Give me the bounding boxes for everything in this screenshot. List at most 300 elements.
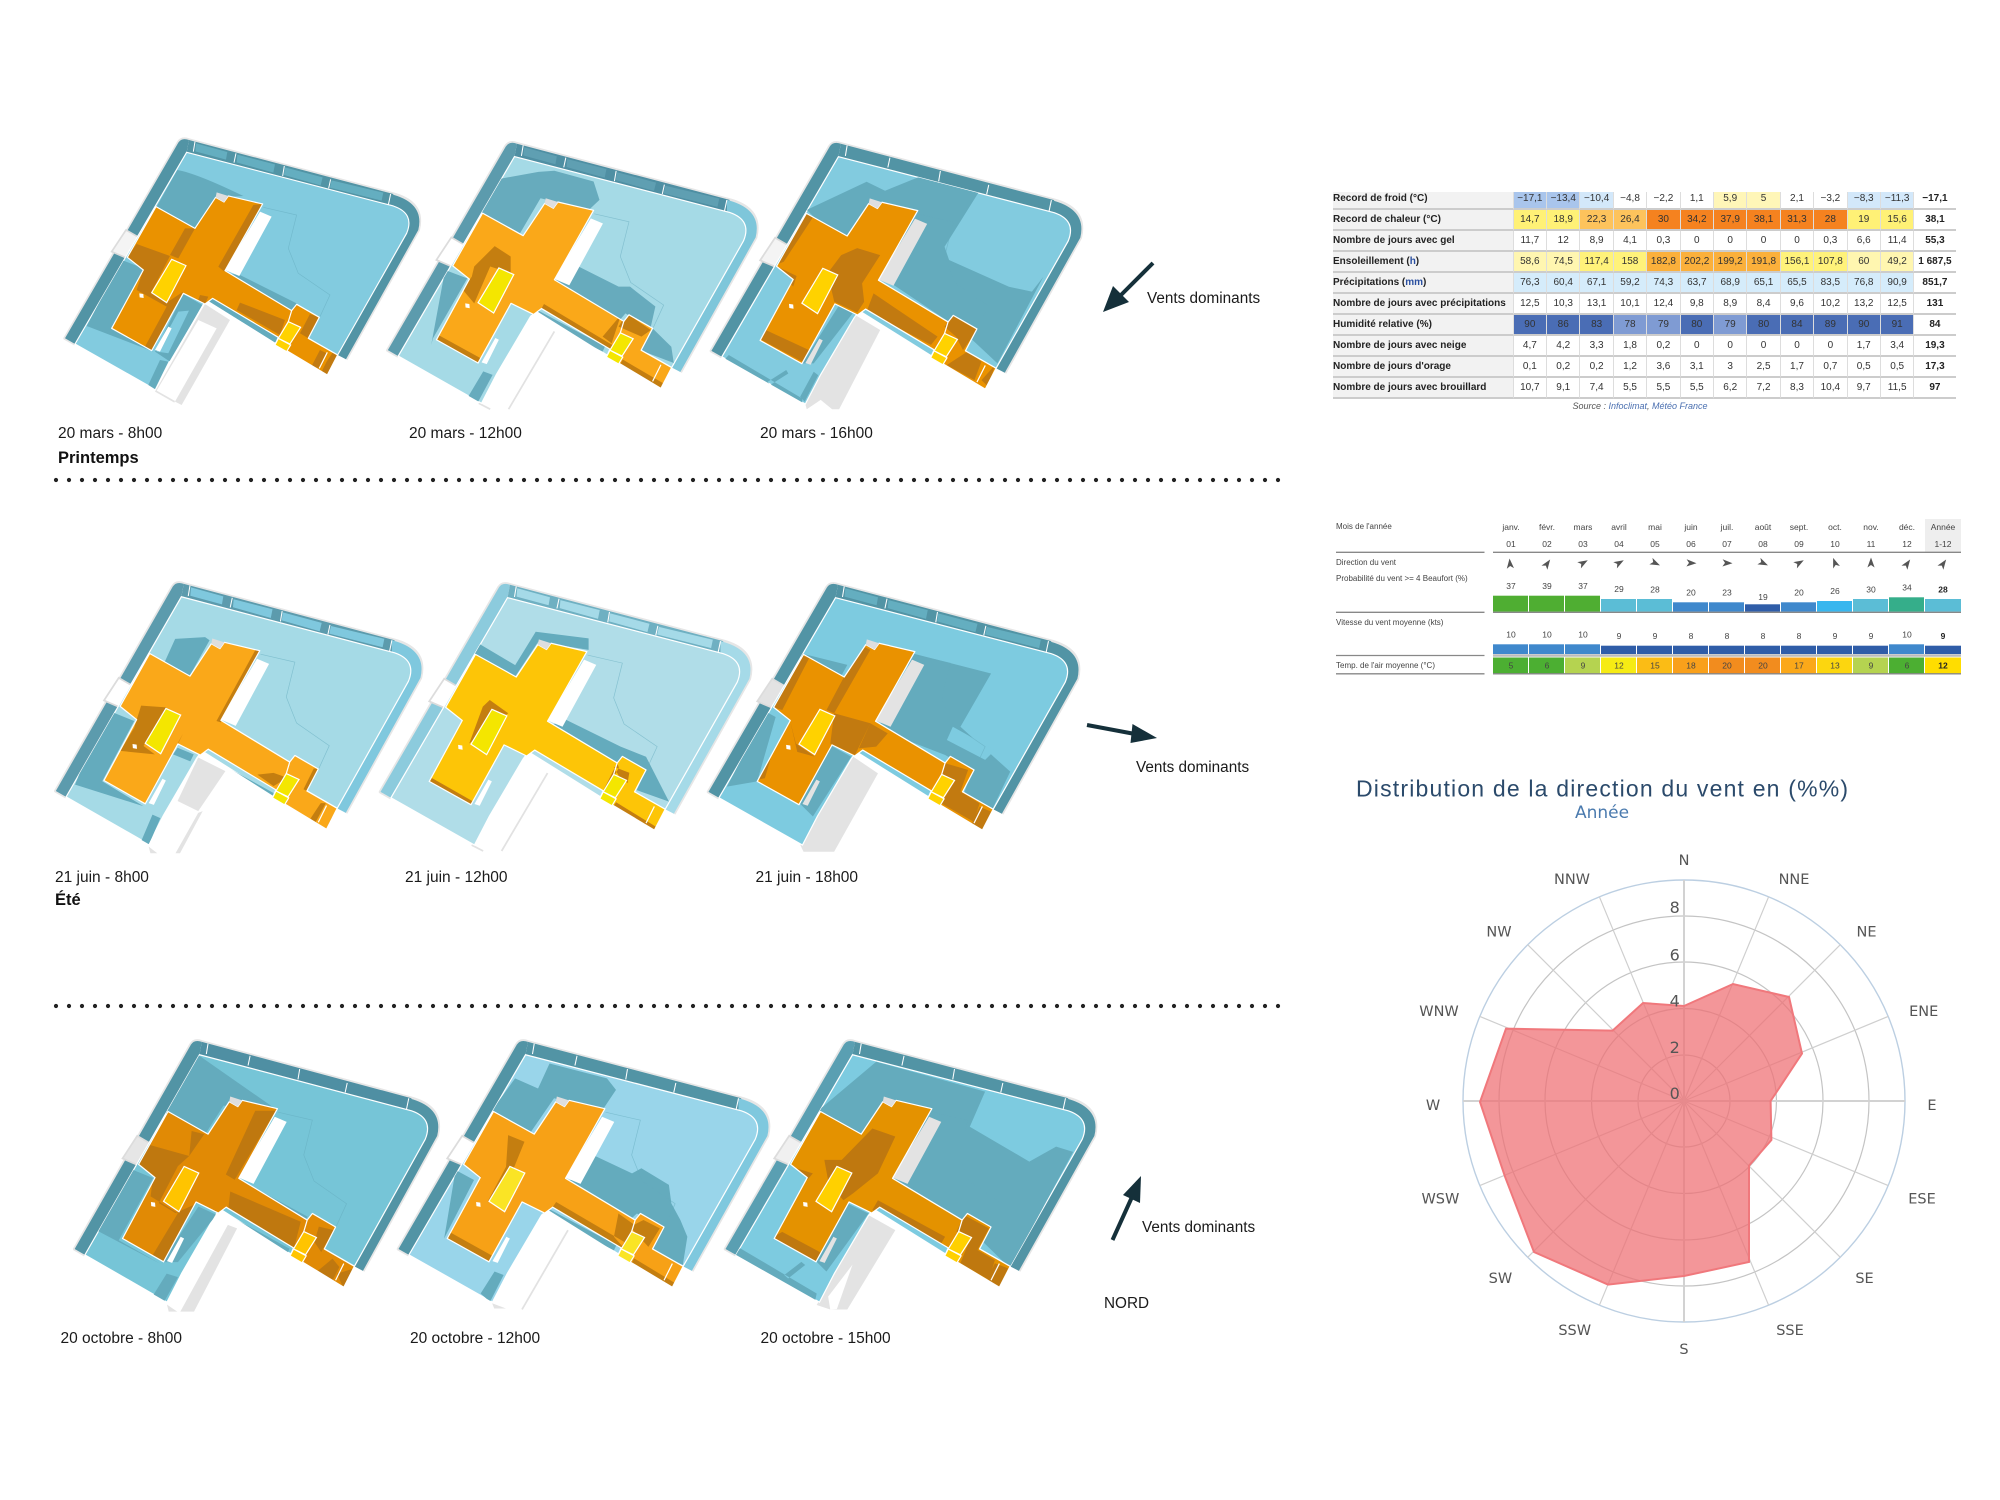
sun and wind study canvas (54, 138, 1961, 1354)
climate table: 10,4 (1821, 382, 1840, 392)
speed values: 9 (1653, 631, 1658, 641)
garden shadows (724, 177, 1043, 403)
label: north: NORD (1104, 1295, 1149, 1312)
climate table: 9,7 (1857, 382, 1871, 392)
climate table: Nombre de jours avec gel (1333, 234, 1455, 246)
climate table: Record de chaleur (°C) (1333, 214, 1441, 224)
climate table: 0,2 (1590, 360, 1604, 372)
climate table: 0 (1727, 234, 1733, 246)
probability values (1506, 581, 1948, 602)
climate table: 55,3 (1925, 234, 1945, 246)
caption: 21 juin - 12h00 (405, 869, 508, 886)
month headers: 01 (1506, 539, 1516, 549)
climate table: 9,6 (1790, 298, 1804, 308)
plan: 21 juin 18h00 (708, 584, 1079, 852)
climate table: 10,7 (1520, 382, 1540, 392)
climate table: 90,9 (1887, 276, 1907, 288)
direction labels: S (1679, 1342, 1689, 1358)
speed values: 9 (1941, 631, 1946, 641)
climate table: 79 (1658, 318, 1669, 330)
skylights and outlines (104, 639, 337, 829)
climate table: 0 (1727, 340, 1733, 350)
climate table: −10,4 (1584, 192, 1609, 204)
month headers: nov. (1863, 522, 1879, 532)
climate table: −11,3 (1885, 192, 1909, 204)
month headers: janv. (1501, 522, 1520, 532)
climate table: 0,1 (1523, 360, 1537, 372)
climate table: 11,7 (1520, 234, 1539, 246)
probability values: 37 (1506, 581, 1516, 591)
month headers: 12 (1902, 539, 1912, 549)
climate table: 12,5 (1520, 298, 1540, 308)
header shading: year (1925, 519, 1961, 553)
caption: 21 juin - 8h00 (55, 869, 149, 886)
plan: 20 octobre 8h00 (75, 1041, 438, 1312)
wind rose chart (1419, 853, 1938, 1358)
courtyards (492, 1112, 675, 1263)
climate table: 5,5 (1656, 382, 1670, 392)
climate table: Humidité relative (%) (1333, 318, 1432, 330)
skylights and outlines (757, 639, 993, 830)
road (479, 331, 554, 409)
courtyards (805, 214, 988, 365)
month headers: juin (1683, 522, 1698, 532)
direction labels: WSW (1421, 1192, 1459, 1208)
month headers: 09 (1794, 539, 1804, 549)
month headers: 06 (1686, 539, 1696, 549)
building (123, 1100, 354, 1287)
climate table: 58,6 (1520, 256, 1540, 266)
climate table: 10,1 (1620, 298, 1640, 308)
radial axis labels: 8 (1670, 898, 1680, 917)
probability values: 34 (1902, 582, 1912, 592)
climate table: 10,3 (1554, 298, 1573, 308)
climate table: 0,5 (1890, 360, 1904, 372)
garden shadows (727, 653, 1010, 817)
temperature values: 15 (1650, 660, 1660, 670)
probability values: 28 (1650, 584, 1660, 594)
climate table: −8,3 (1854, 192, 1874, 204)
climate table: 0,2 (1556, 360, 1570, 372)
climate table: 90 (1858, 318, 1869, 330)
climate table: 107,8 (1818, 256, 1843, 266)
direction labels (1419, 853, 1938, 1358)
climate table: 30 (1658, 214, 1669, 224)
climate table: 5,5 (1690, 382, 1704, 392)
plan: 20 octobre 12h00 (398, 1041, 769, 1309)
climate table: 60 (1858, 256, 1869, 266)
direction labels: W (1426, 1098, 1440, 1114)
temperature values: 17 (1794, 660, 1804, 670)
skylights and outlines (436, 198, 672, 388)
climate table: 12,4 (1654, 298, 1673, 308)
temperature cells (1493, 658, 1961, 674)
building shadows (120, 650, 337, 829)
wind direction arrows (1506, 557, 1949, 570)
climate table: 191,8 (1751, 256, 1776, 266)
climate table: 83 (1591, 318, 1602, 330)
climate table: 80 (1758, 318, 1769, 330)
garden shadows (732, 1062, 1073, 1302)
skylights and outlines (447, 1097, 683, 1287)
label: wind spring: Vents dominants (1147, 290, 1260, 307)
climate table: Nombre de jours avec neige (1333, 340, 1466, 350)
temperature values: 12 (1614, 660, 1624, 670)
climate table: 12,5 (1887, 298, 1907, 308)
speed values: 9 (1833, 631, 1838, 641)
temperature values: 9 (1581, 660, 1586, 670)
chart subtitle: Année (1575, 803, 1629, 823)
month headers: août (1755, 522, 1772, 532)
arrow: wind spring (1103, 263, 1153, 312)
climate table: 97 (1929, 382, 1940, 392)
climate table: 26,4 (1620, 214, 1640, 224)
climate table: 1,7 (1857, 340, 1871, 350)
row labels (1336, 522, 1468, 670)
climate table: 0,3 (1823, 234, 1837, 246)
month headers: 03 (1578, 539, 1588, 549)
climate table: 8,9 (1590, 234, 1604, 246)
rings (1463, 880, 1905, 1322)
arrow: wind summer (1087, 724, 1157, 743)
garden shadows (474, 632, 669, 802)
building shadows (436, 246, 663, 388)
climate table: 199,2 (1718, 256, 1743, 266)
road wedge (828, 1265, 853, 1309)
garden shadows (96, 1055, 308, 1306)
month headers: 1-12 (1934, 539, 1952, 549)
building shadows (771, 1129, 1008, 1288)
climate table: 3,6 (1656, 360, 1670, 372)
building (436, 202, 672, 388)
temperature values: 20 (1758, 660, 1768, 670)
temperature values: 6 (1545, 660, 1550, 670)
direction labels: SE (1855, 1271, 1874, 1287)
climate table: 84 (1791, 318, 1803, 330)
month headers: avril (1611, 522, 1627, 532)
road corner (492, 1303, 506, 1308)
climate table: 37,9 (1720, 214, 1740, 224)
climate table: Nombre de jours avec précipitations (1333, 298, 1506, 308)
garden shadows (444, 1063, 687, 1302)
climate table: 0,7 (1823, 360, 1837, 372)
climate table: 0,5 (1857, 360, 1871, 372)
skylights and outlines (760, 198, 996, 389)
table source: Source : Infoclimat, Météo France (1572, 401, 1708, 411)
month headers: 11 (1867, 539, 1876, 549)
climate table: 38,1 (1925, 214, 1945, 224)
climate table: 3,4 (1890, 340, 1904, 350)
climate table: 19 (1858, 214, 1869, 224)
month headers (1501, 522, 1956, 549)
skylights and outlines (429, 639, 665, 830)
month headers: 08 (1758, 539, 1768, 549)
heading: Été: Été (55, 890, 81, 909)
month headers: 02 (1542, 539, 1552, 549)
climate table: 7,4 (1590, 382, 1604, 392)
chart title: Distribution de la direction du vent en (%%) (1356, 776, 1848, 802)
climate table (1333, 192, 1956, 399)
climate table: 17,3 (1925, 360, 1945, 372)
caption: 20 octobre - 8h00 (60, 1330, 182, 1347)
climate table: 3 (1727, 360, 1733, 372)
building shadows (127, 204, 338, 375)
plan: 21 juin 12h00 (380, 584, 751, 851)
direction labels: NNE (1779, 872, 1809, 888)
row labels: Temp. de l'air moyenne (°C) (1336, 661, 1435, 670)
climate table: Nombre de jours d'orage (1333, 360, 1451, 372)
climate table: 4,7 (1523, 340, 1537, 350)
climate table: 9,8 (1690, 298, 1704, 308)
road (800, 757, 878, 852)
garden shadows (87, 170, 297, 389)
probability values: 28 (1938, 584, 1948, 594)
climate table: 13,1 (1587, 298, 1606, 308)
climate table: 68,9 (1720, 276, 1740, 288)
data polygon (1480, 984, 1802, 1285)
climate table: 31,3 (1787, 214, 1807, 224)
heading: Printemps: Printemps (58, 449, 139, 467)
building shadows (755, 645, 991, 830)
caption: 21 juin - 18h00 (756, 869, 858, 886)
month headers: déc. (1899, 522, 1915, 532)
climate table: 60,4 (1554, 276, 1573, 288)
road (805, 315, 880, 409)
climate table: 90 (1524, 318, 1535, 330)
climate table: 14,7 (1520, 214, 1540, 224)
radial axis labels: 6 (1670, 946, 1680, 964)
month headers: sept. (1790, 522, 1808, 532)
temperature values: 20 (1722, 660, 1732, 670)
climate table: 4,1 (1623, 234, 1637, 246)
road (522, 1230, 568, 1309)
climate table: 8,4 (1757, 298, 1771, 308)
climate table: 2,5 (1757, 360, 1771, 372)
temperature values: 5 (1509, 660, 1514, 670)
label: wind summer: Vents dominants (1136, 759, 1249, 776)
road (167, 1225, 237, 1312)
plan: 20 mars 16h00 (711, 143, 1081, 409)
climate table: 49,2 (1887, 256, 1907, 266)
climate table: 10,2 (1821, 298, 1840, 308)
site and garden (75, 1041, 438, 1302)
climate table: 0 (1794, 234, 1800, 246)
plan: 20 octobre 15h00 (726, 1041, 1096, 1309)
climate table: 3,1 (1690, 360, 1704, 372)
courtyards (802, 655, 985, 806)
probability values: 29 (1614, 584, 1624, 594)
climate table: −17,1 (1922, 192, 1948, 204)
label: wind autumn: Vents dominants (1142, 1219, 1255, 1236)
climate table: Record de froid (°C) (1333, 192, 1428, 204)
direction labels: SSE (1776, 1323, 1804, 1339)
probability values: 39 (1542, 581, 1552, 591)
temperature values: 9 (1869, 660, 1874, 670)
site and garden (388, 143, 757, 403)
speed values: 8 (1761, 631, 1766, 641)
climate table: 12 (1558, 234, 1569, 246)
direction labels: N (1679, 853, 1689, 869)
speed values: 8 (1797, 631, 1802, 641)
caption: 20 octobre - 15h00 (760, 1330, 891, 1347)
climate table: 1 687,5 (1918, 256, 1952, 266)
climate table: 2,1 (1790, 192, 1804, 204)
climate table: Nombre de jours avec brouillard (1333, 382, 1486, 392)
speed values: 10 (1506, 629, 1516, 639)
climate table: 0,3 (1656, 234, 1670, 246)
climate table: 89 (1825, 318, 1836, 330)
row labels: Probabilité du vent >= 4 Beaufort (%) (1336, 574, 1468, 583)
row labels: Vitesse du vent moyenne (kts) (1336, 618, 1444, 627)
climate table: 74,5 (1554, 256, 1573, 266)
month headers: Année (1931, 522, 1956, 532)
climate table: 78 (1624, 318, 1636, 330)
climate table: 5 (1761, 192, 1766, 204)
direction labels: SSW (1558, 1323, 1591, 1339)
road (817, 1215, 895, 1309)
probability values: 19 (1758, 592, 1768, 602)
speed values: 10 (1578, 629, 1588, 639)
climate table: −3,2 (1820, 192, 1840, 204)
climate table: 63,7 (1687, 276, 1707, 288)
month headers: 05 (1650, 539, 1660, 549)
climate table: 83,5 (1821, 276, 1840, 288)
climate table: 182,8 (1651, 256, 1676, 266)
speed values: 10 (1902, 629, 1912, 639)
climate table: Ensoleillement (h) (1333, 256, 1419, 266)
spokes (1480, 897, 1888, 1305)
climate table: −17,1 (1517, 192, 1542, 204)
site and garden (56, 583, 422, 844)
direction labels: E (1927, 1098, 1937, 1114)
caption: 20 octobre - 12h00 (410, 1330, 541, 1347)
road (149, 758, 225, 853)
speed values: 8 (1689, 631, 1694, 641)
garden shadows (75, 637, 274, 847)
month headers: 07 (1722, 539, 1732, 549)
climate table: 0 (1694, 340, 1700, 350)
climate table: 0 (1794, 340, 1800, 350)
plan: 20 mars 8h00 (65, 139, 419, 405)
caption: 20 mars - 12h00 (409, 425, 522, 442)
road (155, 304, 230, 405)
skylights and outlines (774, 1097, 1010, 1287)
climate table: 84 (1929, 318, 1940, 330)
direction labels: NW (1486, 924, 1512, 940)
climate table: 65,5 (1787, 276, 1807, 288)
climate table: 851,7 (1922, 276, 1947, 288)
month headers: mai (1648, 522, 1662, 532)
courtyards (482, 214, 664, 364)
probability values: 20 (1794, 588, 1804, 598)
building (447, 1100, 683, 1287)
climate table: 13,2 (1854, 298, 1873, 308)
climate table: 131 (1927, 298, 1943, 308)
building (112, 196, 338, 375)
building (774, 1100, 1010, 1287)
climate table: 38,1 (1754, 214, 1773, 224)
climate table: 28 (1825, 214, 1836, 224)
direction labels: SW (1489, 1271, 1512, 1287)
climate table: 76,3 (1520, 276, 1540, 288)
climate table: 5,5 (1623, 382, 1637, 392)
speed values: 9 (1617, 631, 1622, 641)
climate table: 22,3 (1587, 214, 1606, 224)
climate table: 0 (1761, 340, 1766, 350)
climate table: 4,2 (1556, 340, 1570, 350)
radial axis labels: 0 (1670, 1084, 1680, 1103)
month headers: févr. (1539, 522, 1555, 532)
climate table: −13,4 (1551, 192, 1576, 204)
climate table: 6,2 (1723, 382, 1737, 392)
site and garden (380, 584, 751, 845)
probability values: 20 (1686, 588, 1696, 598)
climate table: 19,3 (1925, 340, 1945, 350)
speed values (1506, 629, 1946, 641)
climate table: 3,3 (1590, 340, 1604, 350)
site and garden (65, 139, 419, 389)
climate table: 74,3 (1654, 276, 1673, 288)
courtyards (167, 1112, 347, 1263)
climate table: −2,2 (1654, 192, 1673, 204)
climate table: 15,6 (1887, 214, 1907, 224)
courtyards (474, 655, 657, 806)
climate table: 1,7 (1790, 360, 1804, 372)
climate table: 86 (1558, 318, 1569, 330)
speed values: 8 (1725, 631, 1730, 641)
radial axis labels (1670, 898, 1680, 1103)
site and garden (708, 584, 1079, 845)
climate table: 34,2 (1687, 214, 1707, 224)
climate table: Précipitations (mm) (1333, 276, 1426, 288)
speed values: 9 (1869, 631, 1874, 641)
radial axis labels: 4 (1670, 992, 1680, 1010)
climate table: 80 (1691, 318, 1702, 330)
row labels: Mois de l'année (1336, 522, 1392, 531)
caption: 20 mars - 16h00 (760, 425, 873, 442)
climate table: 8,3 (1790, 382, 1804, 392)
temperature values: 12 (1938, 660, 1948, 670)
climate table: 0,2 (1656, 340, 1670, 350)
temperature values (1509, 660, 1948, 670)
climate table: 0 (1694, 234, 1700, 246)
climate table: 202,2 (1684, 256, 1709, 266)
radial axis labels: 2 (1670, 1038, 1680, 1057)
climate table: 6,6 (1857, 234, 1871, 246)
skylights and outlines (112, 192, 338, 375)
site and garden (398, 1041, 769, 1302)
temperature values: 6 (1905, 660, 1910, 670)
wind statistics table (1336, 519, 1961, 674)
climate table: 158 (1622, 256, 1638, 266)
climate table: 1,8 (1623, 340, 1637, 350)
arrow: wind autumn (1112, 1176, 1141, 1240)
climate table: 18,9 (1554, 214, 1573, 224)
row labels: Direction du vent (1336, 558, 1397, 567)
direction labels: ENE (1909, 1004, 1938, 1020)
climate table: 65,1 (1754, 276, 1773, 288)
probability values: 30 (1866, 584, 1876, 594)
building shadows (759, 213, 995, 387)
climate table: 91 (1892, 318, 1903, 330)
month headers: 04 (1614, 539, 1624, 549)
building shadows (135, 1111, 353, 1289)
climate table: 9,1 (1556, 382, 1570, 392)
courtyards (155, 207, 330, 352)
plan: 20 mars 12h00 (388, 143, 757, 409)
temperature values: 13 (1830, 660, 1840, 670)
building (429, 643, 665, 830)
